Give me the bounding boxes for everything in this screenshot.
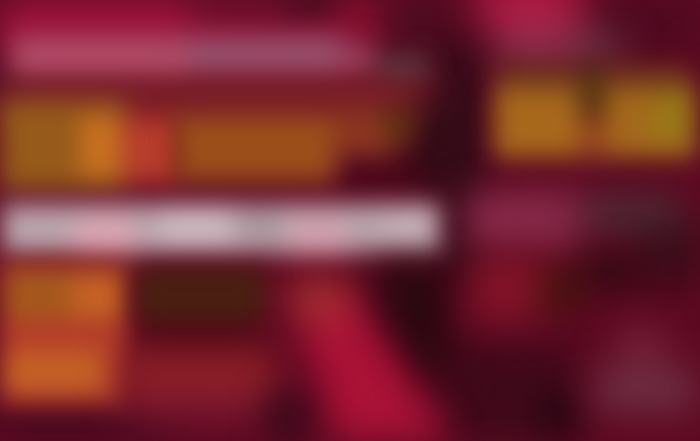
panel: middle-right band [465, 192, 700, 249]
text block: bottom-middle red lines [118, 350, 278, 420]
panel: headline row background [0, 85, 455, 195]
panel: bottom-middle dark block [136, 268, 266, 350]
shape: dark divider [270, 262, 455, 441]
panel: large orange figure [0, 100, 178, 190]
panel: top-right highlight [470, 0, 625, 64]
heading: title band [12, 36, 428, 84]
panel: lower-right red shape [472, 255, 640, 320]
shape: crimson diagonal [285, 278, 450, 441]
icon: bottom-right emblem [595, 323, 695, 412]
panel: orange headline text block [176, 108, 413, 182]
panel: bottom-left orange figures [0, 262, 128, 404]
panel: gold figures [494, 66, 696, 160]
text block: white banner [2, 204, 440, 256]
